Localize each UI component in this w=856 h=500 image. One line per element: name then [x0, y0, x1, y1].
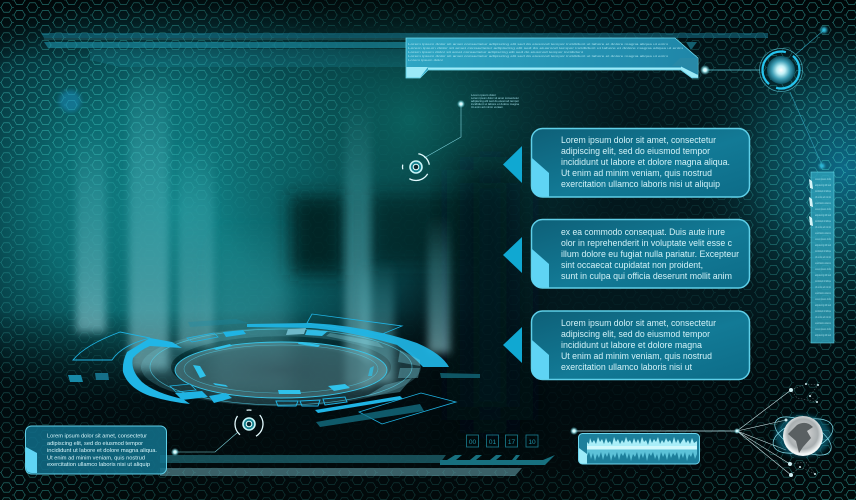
small callout: Lorem ipsum dolor sit amet, consectetur	[47, 434, 147, 440]
vertical data panel: incididunt ut labore	[815, 189, 831, 193]
callout 1: Lorem ipsum dolor sit amet, consectetur	[561, 135, 716, 145]
icon: upper target with connector	[400, 100, 465, 183]
inner disc	[175, 342, 387, 398]
small data text block: adipiscing elit sed do eiusmod tempor	[471, 99, 519, 103]
right inner blocks	[365, 350, 420, 397]
vertical data panel	[809, 164, 834, 343]
callout 3: Lorem ipsum dolor sit amet, consectetur	[561, 318, 716, 328]
callout 3: adipiscing elit, sed do eiusmod tempor	[561, 329, 710, 339]
icon: globe with network	[734, 383, 837, 477]
icon: lower target with connector	[171, 404, 269, 456]
callout 1	[503, 128, 750, 197]
header small text: Lorem ipsum dolor sit amet consectetur adipiscing elit sed do eiusmod tempor incididunt ut labore et dolore magna aliqua ut enim	[408, 54, 668, 58]
small data text block: Lorem ipsum dolor	[471, 93, 496, 97]
vertical data panel: incididunt ut labore	[815, 309, 831, 313]
vertical data panel: Ut enim ad minim	[815, 285, 831, 289]
vertical data panel: Lorem ipsum dolor	[815, 297, 831, 301]
outer top-right crescent	[247, 323, 449, 367]
translucent band	[156, 332, 406, 402]
callout 1: incididunt ut labore et dolore magna aliqua.	[561, 157, 730, 167]
bottom segments	[170, 384, 403, 413]
vertical data panel: Ut enim ad minim	[815, 255, 831, 259]
arrow 2	[503, 237, 522, 273]
vertical data panel: adipiscing elit sed	[815, 273, 831, 277]
vertical data panel: Lorem ipsum dolor	[815, 207, 831, 211]
vertical data panel: Lorem ipsum dolor	[815, 327, 831, 331]
callout 1: exercitation ullamco laboris nisi ut aliquip	[561, 179, 720, 189]
callout 2: sunt in culpa qui officia deserunt mollit anim	[561, 271, 732, 281]
waveform panel	[570, 427, 737, 464]
top outlined plate	[307, 314, 402, 335]
vertical data panel: exercitation ullamco	[815, 261, 831, 265]
callout 2: olor in reprehenderit in voluptate velit esse c	[561, 238, 732, 248]
waveform	[587, 437, 697, 461]
vertical data panel: incididunt ut labore	[815, 249, 831, 253]
header small text: Lorem ipsum dolor sit amet consectetur adipiscing elit sed do eiusmod tempor incididunt	[408, 50, 583, 54]
small callout: adipiscing elit, sed do eiusmod tempor	[47, 441, 143, 447]
callout 3: exercitation ullamco laboris nisi ut	[561, 362, 692, 372]
vertical data panel: adipiscing elit sed	[815, 213, 831, 217]
small data text block	[471, 93, 520, 109]
counter boxes	[466, 435, 538, 447]
top segments	[187, 319, 384, 348]
counter boxes: 00	[469, 439, 476, 446]
vertical data panel: adipiscing elit sed	[815, 243, 831, 247]
vertical data panel: exercitation ullamco	[815, 201, 831, 205]
vertical data panel: Lorem ipsum dolor	[815, 177, 831, 181]
vertical data panel: Lorem ipsum dolor	[815, 267, 831, 271]
callout 2: illum dolore eu fugiat nulla pariatur. Excepteur	[561, 249, 739, 259]
callout 2	[503, 220, 750, 288]
vertical data panel: exercitation ullamco	[815, 321, 831, 325]
vertical data panel: Lorem ipsum dolor	[815, 237, 831, 241]
arrow 1	[503, 146, 522, 183]
vertical data panel: Ut enim ad minim	[815, 315, 831, 319]
connector and node: header	[700, 65, 760, 75]
vertical data panel: exercitation ullamco	[815, 231, 831, 235]
small data text block: Lorem ipsum dolor sit amet consectetur	[471, 96, 519, 100]
light beams	[76, 60, 450, 390]
small callout: Ut enim ad minim veniam, quis nostrud	[47, 456, 145, 462]
small callout	[26, 426, 166, 474]
callout 2: ex ea commodo consequat. Duis aute irure	[561, 227, 725, 237]
inner bright segments	[193, 342, 374, 394]
vertical data panel: adipiscing elit sed	[815, 183, 831, 187]
vertical data panel: incididunt ut labore	[815, 219, 831, 223]
small data text block: Ut enim ad minim veniam	[471, 105, 503, 109]
callout 1: Ut enim ad minim veniam, quis nostrud	[561, 168, 712, 178]
bottom right plate	[359, 393, 456, 424]
header panel	[406, 38, 698, 78]
bottom bars	[160, 455, 555, 476]
small callout: exercitation ullamco laboris nisi ut aliquip	[47, 462, 150, 468]
header small text	[408, 42, 683, 62]
left dashes	[68, 375, 83, 382]
vertical data panel: adipiscing elit sed	[815, 303, 831, 307]
callout 2: sint occaecat cupidatat non proident,	[561, 260, 703, 270]
header small text: Lorem ipsum dolor sit amet consectetur adipiscing elit sed do eiusmod tempor incididunt ut labore et dolore magna aliqua ut enim	[408, 42, 668, 46]
vertical data panel: Ut enim ad minim	[815, 225, 831, 229]
vertical data panel: incididunt ut labore	[815, 279, 831, 283]
outer left crescent	[123, 338, 190, 404]
top bars	[41, 33, 768, 67]
counter boxes: 10	[528, 439, 536, 446]
counter boxes: 01	[489, 439, 496, 446]
header small text: Lorem ipsum dolor sit amet consectetur adipiscing elit sed do eiusmod tempor incididunt ut labore et dolore magna aliqua ut enim	[408, 46, 683, 50]
callout 3: incididunt ut labore et dolore magna	[561, 340, 702, 350]
small data text block: incididunt ut labore et dolore magna	[471, 102, 520, 106]
vertical data panel: Ut enim ad minim	[815, 195, 831, 199]
small callout: incididunt ut labore et dolore magna aliqua.	[47, 448, 157, 454]
icon: top right target	[760, 27, 827, 165]
callout 1: adipiscing elit, sed do eiusmod tempor	[561, 146, 710, 156]
counter boxes: 17	[508, 439, 515, 446]
vertical data panel: exercitation ullamco	[815, 291, 831, 295]
callout 3: Ut enim ad minim veniam, quis nostrud	[561, 351, 712, 361]
header small text: Lorem ipsum dolor	[408, 58, 443, 62]
outlined left segment	[73, 332, 150, 360]
callout 3	[503, 311, 750, 380]
holographic ring platform	[68, 314, 480, 427]
vertical data panel: adipiscing elit sed	[815, 333, 831, 337]
arrow 3	[503, 327, 522, 363]
